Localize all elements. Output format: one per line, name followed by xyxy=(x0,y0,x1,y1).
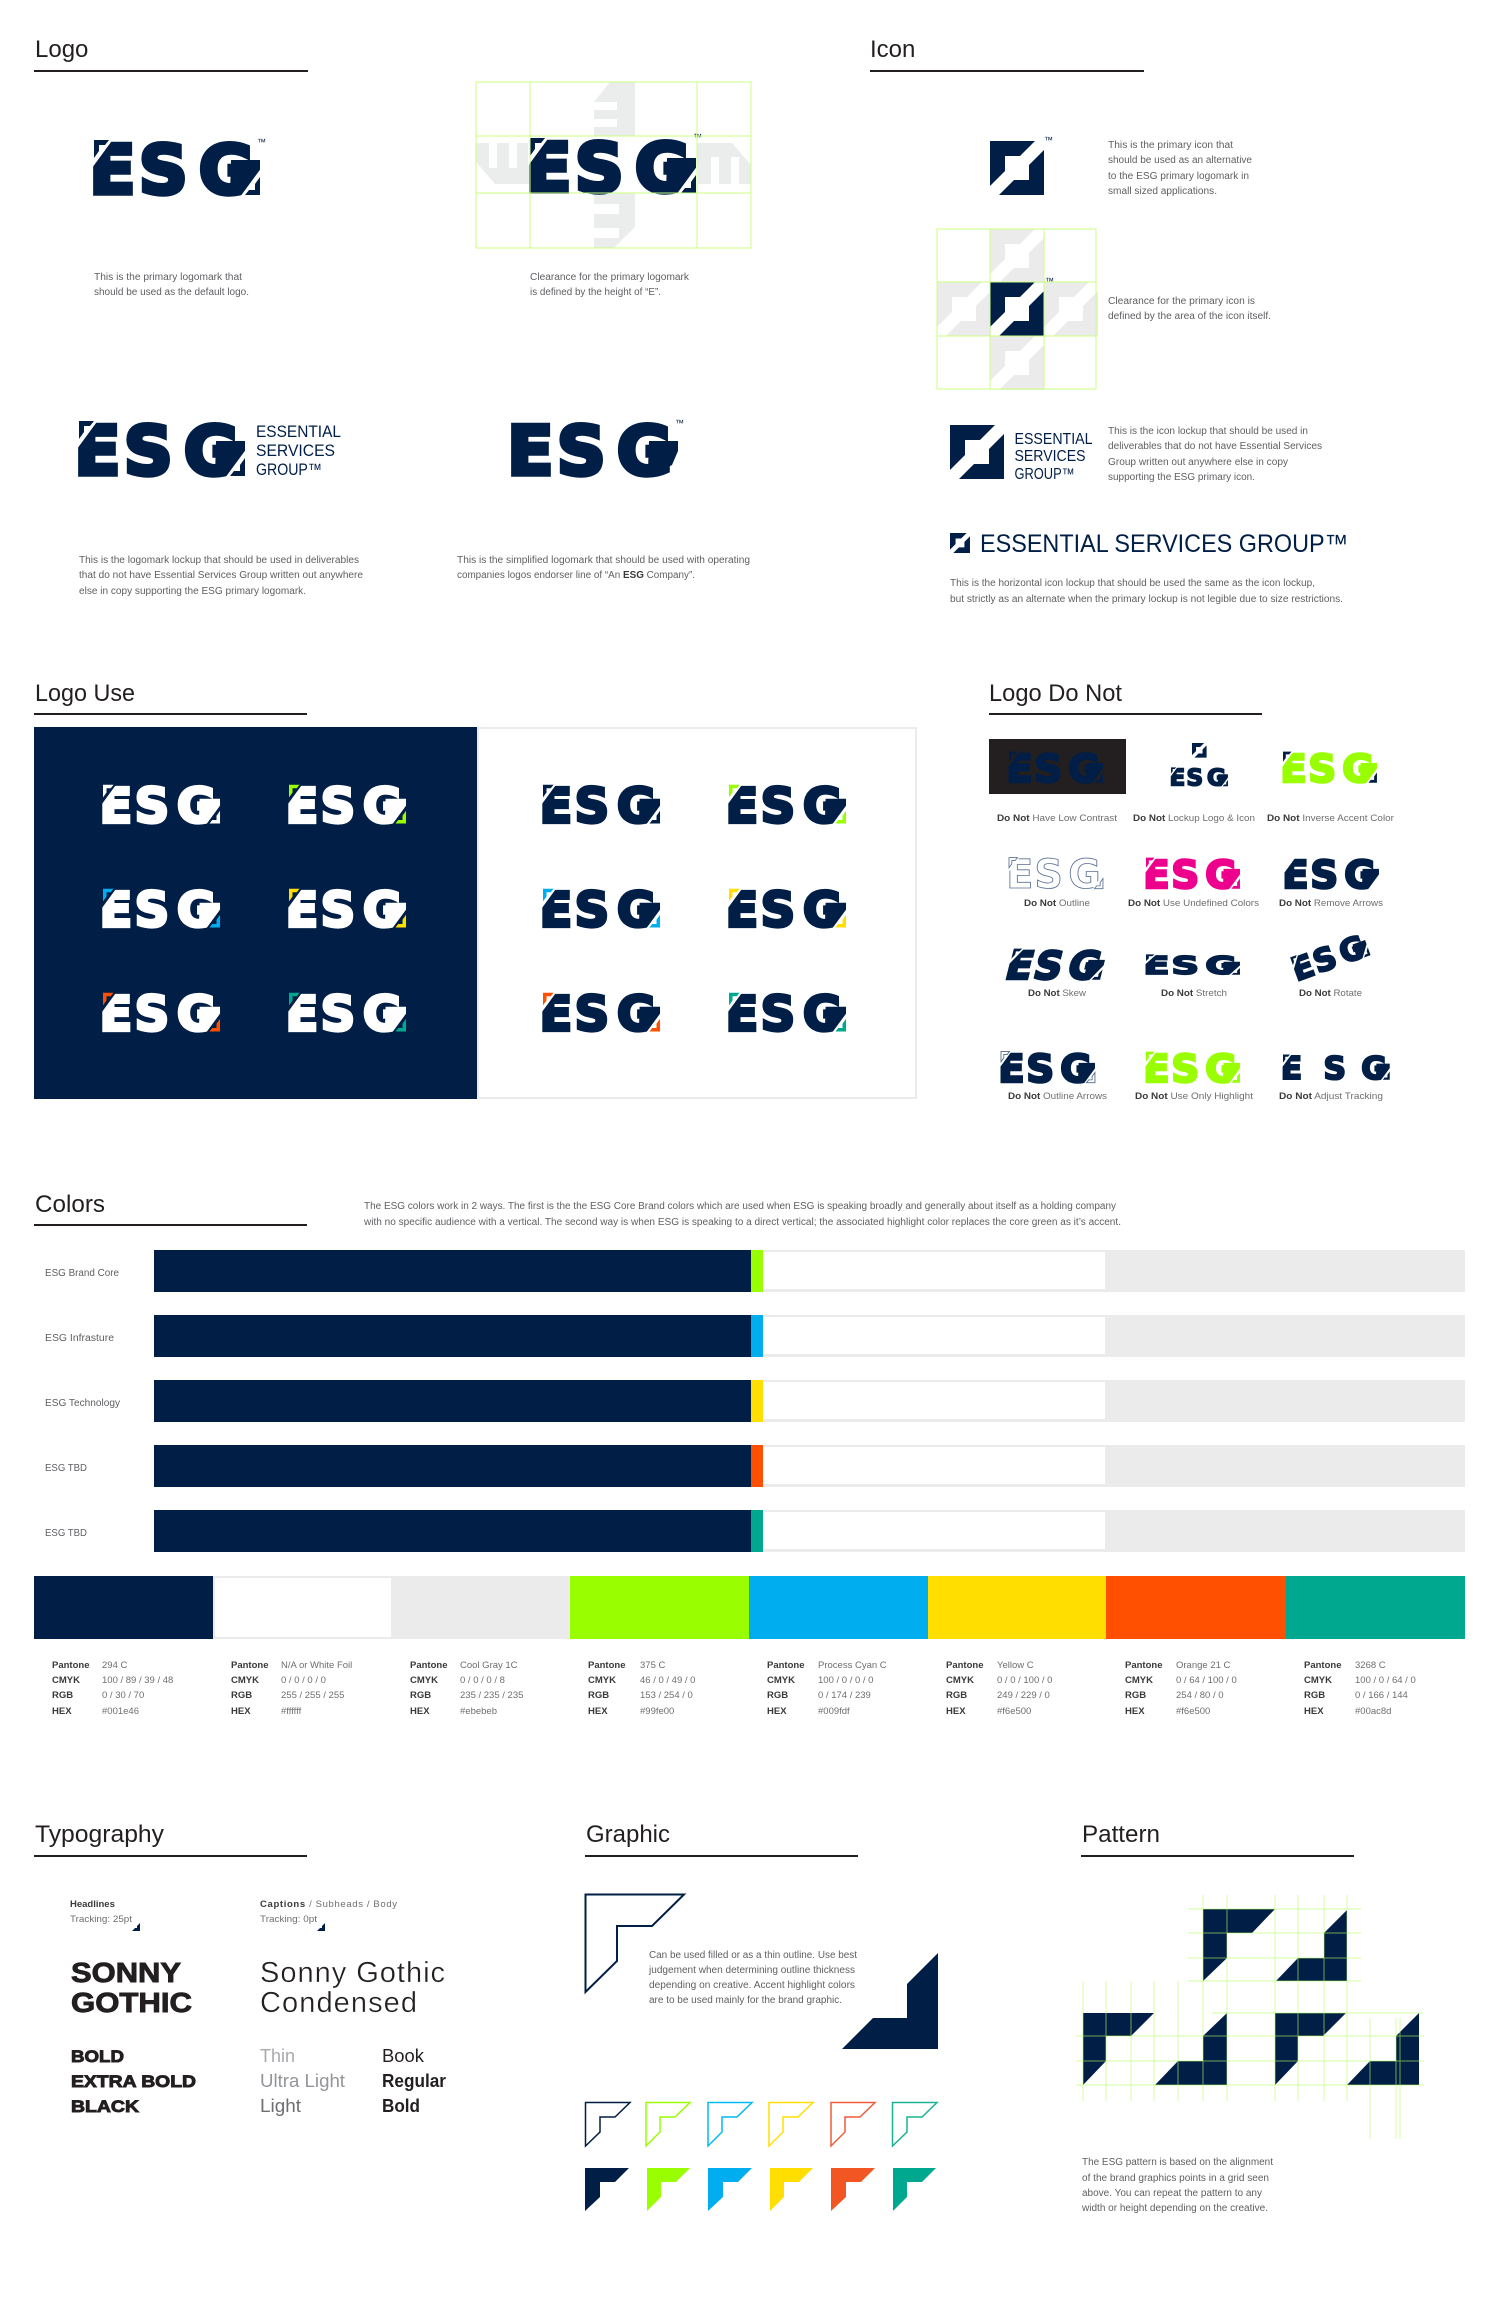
color swatches xyxy=(34,1576,1465,1639)
spec: white xyxy=(231,1660,352,1717)
color bar: infrastructure: ESG Infrasture xyxy=(45,1333,114,1344)
spec: navy: RGB xyxy=(52,1690,73,1701)
text: clearance: Clearance for the primary logomark xyxy=(530,272,690,283)
spec: cyan: 100 / 0 / 0 / 0 xyxy=(818,1675,873,1686)
dark background panel: ESG xyxy=(100,987,216,1042)
spec: yellow: #f6e500 xyxy=(997,1706,1031,1717)
text: horizontal lockup: This is the horizontal icon lockup that should be used the same as the icon lockup, xyxy=(950,578,1315,589)
logomark lockup xyxy=(74,412,341,492)
do not: inverse accent: ESG xyxy=(1280,747,1374,792)
spec: gray: 0 / 0 / 0 / 8 xyxy=(460,1675,505,1686)
spec: white: CMYK xyxy=(231,1675,259,1686)
spec: yellow: RGB xyxy=(946,1690,967,1701)
spec: navy: #001e46 xyxy=(102,1706,139,1717)
spec: orange xyxy=(1125,1660,1237,1717)
color bar: tbd teal: ESG TBD xyxy=(45,1528,87,1539)
do not: rotate: ESG xyxy=(1287,929,1371,989)
headline typeface name: GOTHIC xyxy=(71,1987,192,2018)
spec: orange: 254 / 80 / 0 xyxy=(1176,1690,1224,1701)
logomark lockup: SERVICES xyxy=(256,442,335,460)
text: colors intro: The ESG colors work in 2 ways. The first is the the ESG Core Brand colors which are used when ESG is speaking broadly and generally about itself as a holding company xyxy=(364,1201,1116,1212)
spec: gray: Pantone xyxy=(410,1660,447,1671)
spec: teal: CMYK xyxy=(1304,1675,1332,1686)
body weights: Thin xyxy=(260,2046,295,2066)
dark background panel: ESG xyxy=(286,779,402,834)
spec: green xyxy=(588,1660,695,1717)
spec: yellow: HEX xyxy=(946,1706,966,1717)
text: graphic: judgement when determining outline thickness xyxy=(648,1965,855,1976)
spec: gray: Cool Gray 1C xyxy=(460,1660,518,1671)
spec: gray: CMYK xyxy=(410,1675,438,1686)
spec: teal: 100 / 0 / 64 / 0 xyxy=(1355,1675,1416,1686)
heading: logo do not: Logo Do Not xyxy=(989,680,1122,707)
do not: low contrast: ESG xyxy=(1006,747,1100,792)
text: icon lockup: This is the icon lockup that should be used in xyxy=(1108,426,1308,437)
spec: cyan: #009fdf xyxy=(818,1706,850,1717)
primary logomark: ESG xyxy=(89,132,255,210)
spec: navy: 294 C xyxy=(102,1660,127,1671)
spec: orange: RGB xyxy=(1125,1690,1146,1701)
do not: remove arrows: ESG xyxy=(1282,853,1376,898)
text: lockup: else in copy supporting the ESG primary logomark. xyxy=(79,586,306,597)
color bar: technology: ESG Technology xyxy=(45,1398,120,1409)
spec: gray: RGB xyxy=(410,1690,431,1701)
spec: cyan: HEX xyxy=(767,1706,787,1717)
text: icon lockup: Group written out anywhere else in copy xyxy=(1108,457,1288,468)
panel: logo do not xyxy=(989,680,1394,1102)
text: colors intro xyxy=(363,1201,1121,1228)
primary icon xyxy=(990,135,1053,195)
spec: white: N/A or White Foil xyxy=(281,1660,352,1671)
do not: only highlight xyxy=(1135,1047,1253,1102)
text: pattern xyxy=(1081,2157,1273,2214)
body typeface name xyxy=(260,1957,445,2019)
body weights: Bold xyxy=(382,2096,420,2116)
do not: rotate: Do Not Rotate xyxy=(1299,988,1362,999)
simplified logomark: ™ xyxy=(675,418,684,428)
icon lockup: ESSENTIAL xyxy=(1014,431,1093,448)
spec: green: 375 C xyxy=(640,1660,665,1671)
body weights xyxy=(260,2046,446,2116)
dark background panel xyxy=(34,727,478,1099)
headlines note: Headlines xyxy=(70,1899,115,1910)
panel: logo use xyxy=(34,680,916,1099)
headline weights: BOLD xyxy=(71,2047,124,2066)
spec: navy: 0 / 30 / 70 xyxy=(102,1690,144,1701)
headline weights: EXTRA BOLD xyxy=(71,2072,196,2091)
text: colors intro: with no specific audience with a vertical. The second way is when ESG is speaking to a direct vertical; the associated highlight color replaces the core green as it’s accent. xyxy=(363,1217,1121,1228)
primary logomark: ™ xyxy=(257,137,266,147)
panel: icon xyxy=(870,36,1348,605)
headlines note: Tracking: 25pt xyxy=(70,1914,132,1925)
text: clearance: is defined by the height of “E”. xyxy=(530,287,661,298)
do not: undefined colors: Do Not Use Undefined Colors xyxy=(1128,898,1259,909)
do not: skew: Do Not Skew xyxy=(1028,988,1086,999)
body typeface name: Sonny Gothic xyxy=(260,1957,445,1989)
text: primary logomark: should be used as the default logo. xyxy=(94,287,249,298)
headline typeface name: SONNY xyxy=(71,1957,181,1988)
heading: pattern: Pattern xyxy=(1082,1821,1160,1848)
text: graphic: Can be used filled or as a thin outline. Use best xyxy=(649,1950,857,1961)
large filled graphic xyxy=(842,1953,938,2049)
spec: navy: Pantone xyxy=(52,1660,89,1671)
spec: white: 255 / 255 / 255 xyxy=(281,1690,344,1701)
spec: teal: #00ac8d xyxy=(1355,1706,1391,1717)
heading: logo: Logo xyxy=(35,36,88,63)
spec: teal: RGB xyxy=(1304,1690,1325,1701)
spec: cyan: RGB xyxy=(767,1690,788,1701)
filled graphic variants xyxy=(585,2168,936,2211)
spec: yellow: 0 / 0 / 100 / 0 xyxy=(997,1675,1052,1686)
color bar: brand core xyxy=(45,1250,1465,1292)
spec: teal: Pantone xyxy=(1304,1660,1341,1671)
do not: lockup logo and icon xyxy=(1133,743,1255,824)
dark background panel: ESG xyxy=(100,883,216,938)
spec: gray: #ebebeb xyxy=(460,1706,497,1717)
panel: colors xyxy=(34,1191,1465,1717)
panel: graphic xyxy=(585,1821,938,2211)
spec: green: 153 / 254 / 0 xyxy=(640,1690,693,1701)
outline graphic variants xyxy=(586,2102,937,2146)
spec: teal: 0 / 166 / 144 xyxy=(1355,1690,1408,1701)
light background panel: ESG xyxy=(540,987,656,1042)
icon lockup: SERVICES xyxy=(1014,448,1086,465)
do not: undefined colors: ESG xyxy=(1143,853,1237,898)
light background panel: ESG xyxy=(726,883,842,938)
body weights: Light xyxy=(260,2096,301,2116)
icon lockup: GROUP™ xyxy=(1014,466,1074,483)
spec: green: Pantone xyxy=(588,1660,625,1671)
color bar: tbd teal xyxy=(45,1510,1465,1552)
headline weights xyxy=(71,2047,196,2116)
do not: only highlight: Do Not Use Only Highlight xyxy=(1135,1091,1253,1102)
text: icon lockup: supporting the ESG primary icon. xyxy=(1108,472,1255,483)
dark background panel: ESG xyxy=(286,987,402,1042)
spec: teal xyxy=(1304,1660,1416,1717)
light background panel: ESG xyxy=(726,987,842,1042)
spec: orange: HEX xyxy=(1125,1706,1145,1717)
spec: yellow: 249 / 229 / 0 xyxy=(997,1690,1050,1701)
do not: inverse accent: Do Not Inverse Accent Color xyxy=(1267,813,1394,824)
do not: stretch: Do Not Stretch xyxy=(1161,988,1227,999)
spec: white: HEX xyxy=(231,1706,251,1717)
spec: green: 46 / 0 / 49 / 0 xyxy=(640,1675,695,1686)
text: primary icon: small sized applications. xyxy=(1108,186,1217,197)
dark background panel: ESG xyxy=(100,779,216,834)
primary icon: ™ xyxy=(1044,135,1053,145)
logomark lockup: ESSENTIAL xyxy=(256,423,341,441)
text: primary logomark xyxy=(94,272,249,298)
spec: teal: 3268 C xyxy=(1355,1660,1386,1671)
do not: outline: ESG xyxy=(1006,852,1101,898)
icon clearance diagram xyxy=(937,229,1098,390)
do not: remove arrows: Do Not Remove Arrows xyxy=(1279,898,1383,909)
text: pattern: of the brand graphics points in a grid seen xyxy=(1082,2173,1269,2184)
text: icon lockup: deliverables that do not have Essential Services xyxy=(1108,441,1322,452)
spec: orange: Pantone xyxy=(1125,1660,1162,1671)
spec: cyan: 0 / 174 / 239 xyxy=(818,1690,871,1701)
captions note: Captions / Subheads / Body xyxy=(260,1899,397,1910)
color bar: brand core: ESG Brand Core xyxy=(45,1268,119,1279)
text: icon clearance: Clearance for the primary icon is xyxy=(1108,296,1255,307)
spec: cyan: Pantone xyxy=(767,1660,804,1671)
spec: green: RGB xyxy=(588,1690,609,1701)
captions note: Tracking: 0pt xyxy=(260,1914,317,1925)
color bar: technology xyxy=(45,1380,1465,1422)
horizontal icon lockup: ESSENTIAL SERVICES GROUP™ xyxy=(980,530,1348,558)
do not: stretch: ESG xyxy=(1143,951,1237,980)
spec: yellow: Yellow C xyxy=(997,1660,1034,1671)
body weights: Ultra Light xyxy=(260,2071,345,2091)
spec: orange: Orange 21 C xyxy=(1176,1660,1231,1671)
light background panel: ESG xyxy=(726,779,842,834)
clearance diagram: ESG xyxy=(525,130,691,208)
heading: typography: Typography xyxy=(35,1821,164,1848)
spec: cyan: Process Cyan C xyxy=(818,1660,887,1671)
body typeface name: Condensed xyxy=(260,1987,417,2019)
do not: lockup logo and icon: Do Not Lockup Logo & Icon xyxy=(1133,813,1255,824)
heading: icon: Icon xyxy=(870,36,915,63)
spec: white: 0 / 0 / 0 / 0 xyxy=(281,1675,326,1686)
text: primary icon xyxy=(1108,140,1252,197)
headline typeface name xyxy=(71,1957,192,2018)
panel: typography xyxy=(34,1821,446,2116)
do not: low contrast: Do Not Have Low Contrast xyxy=(997,813,1117,824)
clearance diagram: ™ xyxy=(693,132,702,142)
simplified logomark: ESG xyxy=(507,412,673,492)
do not: outline: Do Not Outline xyxy=(1024,898,1090,909)
text: pattern: width or height depending on the creative. xyxy=(1081,2203,1268,2214)
color bar: tbd orange: ESG TBD xyxy=(45,1463,87,1474)
spec: navy xyxy=(52,1660,173,1717)
text: graphic xyxy=(648,1950,857,2006)
do not: adjust tracking: Do Not Adjust Tracking xyxy=(1279,1091,1383,1102)
do not: outline arrows: Do Not Outline Arrows xyxy=(1008,1091,1107,1102)
color bar: infrastructure xyxy=(45,1315,1465,1357)
headline weights: BLACK xyxy=(71,2097,140,2116)
clearance diagram xyxy=(476,82,751,248)
heading: logo use: Logo Use xyxy=(35,680,135,707)
text: graphic: are to be used mainly for the brand graphic. xyxy=(649,1995,842,2006)
body weights: Book xyxy=(382,2046,425,2066)
light background panel: ESG xyxy=(540,883,656,938)
spec: gray xyxy=(410,1660,523,1717)
color bar: tbd orange xyxy=(45,1445,1465,1487)
do not: adjust tracking xyxy=(1279,1051,1391,1102)
body weights: Regular xyxy=(382,2071,446,2091)
do not: outline arrows: ESG xyxy=(998,1047,1092,1092)
spec: gray: HEX xyxy=(410,1706,430,1717)
text: primary logomark: This is the primary logomark that xyxy=(94,272,242,283)
spec: green: #99fe00 xyxy=(640,1706,674,1717)
headlines note xyxy=(70,1899,140,1931)
text: pattern: The ESG pattern is based on the alignment xyxy=(1082,2157,1273,2168)
do not: lockup logo and icon: ESG xyxy=(1169,765,1226,792)
captions note xyxy=(260,1899,397,1931)
text: pattern: above. You can repeat the pattern to any xyxy=(1082,2188,1262,2199)
logomark lockup: ESG xyxy=(74,412,240,492)
do not: stretch xyxy=(1143,951,1241,999)
spec: green: HEX xyxy=(588,1706,608,1717)
spec: gray: 235 / 235 / 235 xyxy=(460,1690,523,1701)
text: simplified xyxy=(457,555,750,581)
heading: graphic: Graphic xyxy=(586,1821,670,1848)
spec: navy: CMYK xyxy=(52,1675,80,1686)
spec: white: #ffffff xyxy=(281,1706,302,1717)
text: simplified: This is the simplified logomark that should be used with operating xyxy=(457,555,750,566)
text: icon clearance: defined by the area of the icon itself. xyxy=(1108,311,1271,322)
do not: adjust tracking: ESG xyxy=(1281,1051,1387,1087)
text: primary icon: should be used as an alternative xyxy=(1108,155,1252,166)
icon clearance diagram: ™ xyxy=(1045,276,1054,286)
spec: white: RGB xyxy=(231,1690,252,1701)
text: graphic: depending on creative. Accent highlight colors xyxy=(649,1980,855,1991)
do not: undefined colors xyxy=(1128,853,1259,909)
text: horizontal lockup: but strictly as an alternate when the primary lockup is not legible due to size restrictions. xyxy=(950,594,1343,605)
spec: orange: 0 / 64 / 100 / 0 xyxy=(1176,1675,1237,1686)
text: clearance xyxy=(530,272,690,298)
large outline graphic xyxy=(586,1894,684,1992)
text: lockup: that do not have Essential Services Group written out anywhere xyxy=(79,570,363,581)
text: icon clearance xyxy=(1108,296,1271,322)
text: primary icon: to the ESG primary logomark in xyxy=(1108,171,1249,182)
panel: pattern xyxy=(1076,1821,1424,2214)
do not: skew: ESG xyxy=(1001,944,1106,989)
light background panel xyxy=(478,728,916,1098)
pattern diagram xyxy=(1076,1895,1424,2139)
spec: orange: #f6e500 xyxy=(1176,1706,1210,1717)
do not: only highlight: ESG xyxy=(1143,1047,1237,1092)
text: lockup: This is the logomark lockup that should be used in deliverables xyxy=(79,555,359,566)
spec: cyan: CMYK xyxy=(767,1675,795,1686)
do not: inverse accent xyxy=(1267,747,1394,824)
spec: yellow xyxy=(946,1660,1052,1717)
spec: navy: 100 / 89 / 39 / 48 xyxy=(102,1675,173,1686)
spec: teal: HEX xyxy=(1304,1706,1324,1717)
spec: yellow: Pantone xyxy=(946,1660,983,1671)
logomark lockup: GROUP™ xyxy=(256,461,322,479)
panel: logo xyxy=(34,36,751,597)
text: simplified: companies logos endorser line of “An ESG Company”. xyxy=(457,570,695,581)
spec: white: Pantone xyxy=(231,1660,268,1671)
text: horizontal lockup xyxy=(950,578,1343,605)
icon lockup xyxy=(950,425,1093,483)
text: lockup xyxy=(79,555,363,597)
do not: low contrast xyxy=(989,739,1126,824)
text: icon lockup xyxy=(1108,426,1322,483)
spec: cyan xyxy=(767,1660,887,1717)
spec: navy: HEX xyxy=(52,1706,72,1717)
spec: yellow: CMYK xyxy=(946,1675,974,1686)
text: primary icon: This is the primary icon that xyxy=(1108,140,1233,151)
dark background panel: ESG xyxy=(286,883,402,938)
light background panel: ESG xyxy=(540,779,656,834)
spec: orange: CMYK xyxy=(1125,1675,1153,1686)
heading: colors: Colors xyxy=(35,1191,105,1218)
spec: green: CMYK xyxy=(588,1675,616,1686)
